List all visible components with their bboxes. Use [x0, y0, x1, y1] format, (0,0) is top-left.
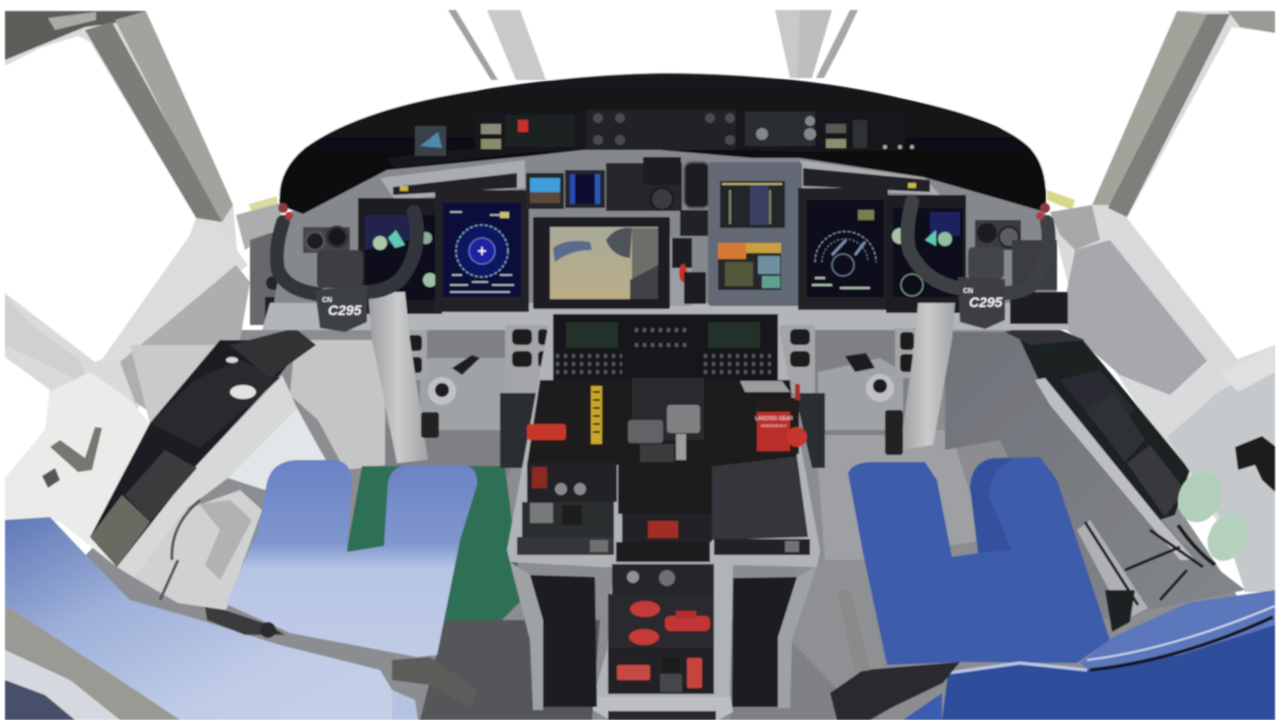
right side window [1127, 27, 1275, 360]
right small gauges [975, 220, 1068, 324]
headset [1170, 436, 1275, 568]
right light band [1035, 378, 1195, 560]
small engine display [565, 170, 605, 208]
door handle [42, 427, 102, 488]
left windscreen pillar [448, 10, 546, 80]
left upper side panel [230, 328, 316, 378]
right PFD [886, 195, 966, 313]
rear floor left [385, 425, 510, 475]
yoke badge: C295 [328, 302, 362, 318]
left pedestal recess [530, 575, 597, 707]
right seat belt [830, 590, 960, 720]
centre windscreen [530, 10, 792, 80]
green carpet [345, 466, 522, 640]
yellow placard [591, 386, 602, 444]
left white sill [5, 372, 150, 567]
left navigation display [435, 190, 529, 312]
under panel shadow [500, 393, 825, 468]
right foreground seat [903, 590, 1275, 720]
glareshield [280, 73, 1046, 214]
yoke badge [963, 288, 1003, 310]
left side console [90, 340, 307, 567]
rear floor right [815, 430, 985, 560]
right annunciator strip [803, 168, 930, 192]
left wall instruments [250, 222, 313, 325]
throttle quadrant panel [527, 380, 797, 510]
left co-seat cushion [226, 460, 477, 657]
main instrument panel [262, 148, 1070, 330]
left corner wall [236, 203, 282, 250]
right upper white bracket [1220, 347, 1275, 392]
left pedestal outer side [510, 562, 543, 710]
right side console [1005, 322, 1190, 520]
right pedestal outer side [778, 566, 817, 708]
central switch panels [612, 462, 714, 594]
left rear wall [290, 340, 385, 470]
left white recess [228, 408, 332, 490]
centre map display [533, 217, 670, 309]
left lower window [5, 357, 50, 478]
left side window [5, 36, 196, 362]
right tag [1047, 190, 1075, 210]
left window strut [5, 295, 88, 385]
standby gauge [684, 162, 710, 208]
right pedestal recess [732, 577, 797, 707]
right yoke column [900, 303, 955, 450]
right upper wall [1060, 240, 1208, 395]
left window frame [5, 11, 238, 520]
cabin base [5, 330, 1275, 720]
left yoke column [368, 292, 428, 463]
yoke badge [322, 297, 362, 318]
switch block with red guard [670, 210, 710, 306]
left annunciator strip [393, 173, 517, 195]
left foreground seat [5, 517, 418, 720]
red warning placard: LANDING GEAR [755, 416, 793, 422]
flight management units [553, 314, 778, 382]
right grey lower wall [945, 332, 1245, 622]
left light band under console [117, 375, 297, 578]
right footwell panel [815, 330, 920, 435]
dark floor right [730, 620, 880, 720]
right window frame [1050, 11, 1275, 600]
yoke badge: C295 [969, 294, 1003, 310]
red guards panel [608, 594, 714, 694]
right navigation display [798, 188, 888, 310]
right white end panel [1167, 360, 1275, 592]
left yoke [277, 203, 417, 332]
grey strip [740, 381, 790, 392]
small attitude display [526, 173, 564, 209]
red warning placard: EMERGENCY [761, 423, 787, 428]
left seat belt [205, 607, 478, 708]
right column base [885, 410, 903, 455]
left tag [249, 196, 278, 214]
red warning placard [755, 384, 807, 454]
right display panel [708, 162, 802, 306]
right lower window trim [1107, 215, 1238, 362]
red lever left [527, 424, 566, 440]
centre pedestal [507, 314, 820, 720]
left upper wall [120, 265, 250, 412]
yoke badge: CN [322, 297, 332, 304]
right windscreen pillar [775, 10, 860, 78]
vent blocks [405, 325, 917, 393]
yoke badge: CN [963, 288, 973, 295]
table right [712, 457, 808, 540]
right floor strip [790, 560, 885, 690]
left column base [421, 412, 439, 438]
left white window rim [100, 222, 248, 362]
left small gauges [303, 227, 350, 253]
right corner wall [1050, 205, 1100, 250]
upper left windscreen [146, 10, 498, 205]
glareshield small instrument [415, 126, 446, 156]
centre control stack [606, 157, 682, 211]
upper right windscreen [825, 10, 1177, 205]
left footwell panel [405, 330, 510, 435]
right wall bracket and cables [1077, 520, 1203, 632]
right seat cushion [848, 457, 1110, 665]
right yoke [907, 202, 1050, 329]
left light wall panel [130, 345, 222, 424]
right button strip [714, 539, 810, 555]
dark floor left [420, 620, 600, 720]
left switch panels [517, 463, 617, 555]
throttle levers [628, 378, 704, 462]
overhead control strip [386, 110, 914, 168]
left lower wall box [135, 490, 262, 610]
left PFD [358, 198, 442, 314]
